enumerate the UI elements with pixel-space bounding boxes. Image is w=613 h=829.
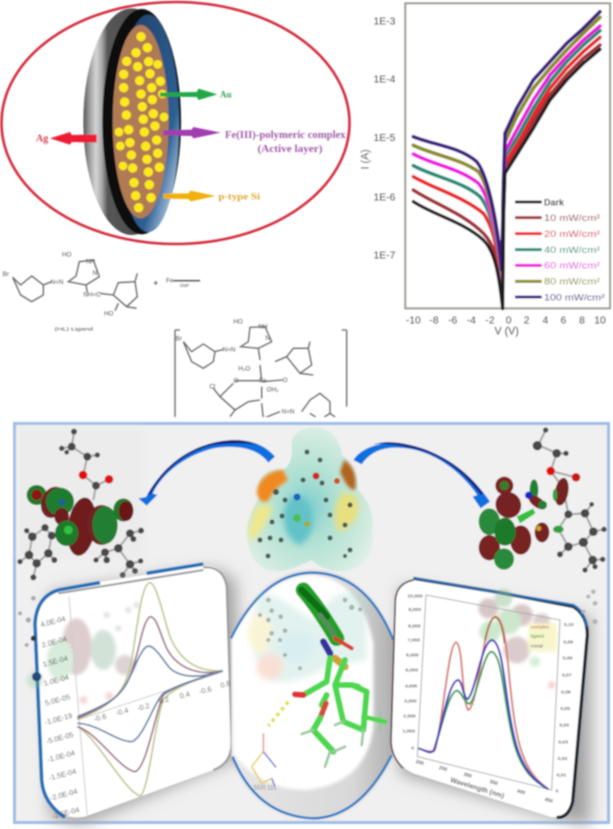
y axis labels: 1E-7 [374, 251, 396, 262]
molecular electrostatic potential surface [247, 427, 373, 571]
y axis labels: 1E-3 [374, 16, 396, 27]
spectrum right axis labels: 0,05 [560, 706, 570, 712]
disc device illustration [83, 8, 181, 235]
card left edge [391, 580, 413, 768]
spectrum left axis labels: 8,000 [408, 623, 421, 629]
chart legend: 80 mW/cm² [544, 277, 600, 287]
voltammogram y axis labels: -2.0E-04 [49, 787, 79, 803]
chemical reaction scheme: OH₂ [267, 387, 279, 394]
panel background and border [14, 424, 608, 822]
spectrum legend text: complex [531, 624, 550, 630]
x axis labels: 10 [594, 315, 606, 326]
ghost atoms outside card [18, 596, 41, 681]
chemical reaction scheme: Br [176, 336, 182, 343]
voltammogram x axis labels: -0.6 [198, 684, 213, 696]
chemical reaction scheme: N [265, 335, 270, 342]
voltammogram x axis labels: -0.6 [93, 712, 107, 724]
arrow and label: Au: Au [220, 90, 231, 100]
ghost orbital image [27, 602, 139, 704]
spectrum right axis labels: 0,07 [562, 673, 572, 679]
spectrum right axis labels: 0,02 [558, 756, 568, 762]
arrow and label: Ag: Ag [36, 133, 48, 144]
ligand structure [3, 252, 137, 317]
card body [392, 579, 587, 817]
chemical reaction scheme: N=N [282, 408, 295, 415]
plus sign and metal reagent: + [153, 278, 158, 287]
y axis title: I (A) [359, 149, 371, 169]
chemical reaction scheme: O [283, 377, 288, 384]
spectrum right axis labels: 0,01 [557, 773, 567, 779]
card: absorption spectrum [391, 578, 598, 827]
x axis labels: -6 [448, 315, 458, 326]
x axis labels: 8 [579, 315, 585, 326]
arrow and label: Ag [36, 132, 97, 145]
arrow and label: Fe(III)-polymeric complex active layer [163, 127, 347, 155]
card blue edge [35, 564, 203, 817]
receptor residue: SER 111 [253, 785, 277, 791]
spectrum x axis labels: 200 [415, 759, 425, 767]
voltammogram y axis labels: 2.0E-04 [41, 634, 68, 650]
chart legend: 20 mW/cm² [544, 229, 600, 239]
arrow and label: p-type Si: p-type Si [218, 192, 260, 202]
docking circle shadow [232, 572, 393, 818]
y axis labels [374, 16, 396, 262]
bottom modelling panel [14, 424, 608, 827]
voltammogram curves [77, 583, 223, 796]
chart legend: 10 mW/cm² [544, 213, 600, 223]
chemical reaction scheme: HO [233, 318, 243, 325]
light background patch [18, 428, 144, 558]
hydrogen bond dashes [268, 702, 288, 726]
chemical reaction scheme: NH [258, 324, 268, 331]
spectrum legend text: ligand [531, 633, 544, 639]
y axis labels: 1E-4 [374, 75, 396, 86]
x axis labels: -10 [406, 315, 421, 326]
x axis labels: 0 [506, 315, 512, 326]
chart frame [405, 3, 610, 308]
spectrum left axis labels: 7,000 [408, 638, 420, 644]
plus sign and metal reagent: Fe [166, 278, 174, 285]
voltammogram y axis labels: -5.0E-05 [45, 730, 75, 746]
ghost electrostatic surface [248, 592, 367, 682]
atoms [17, 429, 144, 580]
curved arrow to HOMO [138, 440, 275, 506]
embedded atoms [258, 450, 352, 558]
spectrum left axis labels: 2,000 [403, 713, 416, 719]
voltammogram y axis labels: -1.0E-04 [46, 748, 76, 764]
card dark right edge [413, 578, 587, 817]
ghost atoms outside card [581, 589, 598, 624]
arrow and label: Fe(III)-polymeric complex active layer: Fe(III)-polymeric complex [225, 130, 347, 141]
voltammogram y axis labels: -1.0E-19 [44, 711, 73, 727]
plus sign and metal reagent: DMF [180, 283, 190, 288]
chemical reaction scheme [3, 252, 347, 420]
voltammogram y axis labels: 4.0E-04 [39, 614, 67, 629]
spectrum legend text: metal [531, 643, 543, 649]
card grey edge [58, 567, 232, 770]
card shadow [50, 568, 242, 825]
device schematic panel [2, 2, 350, 244]
orbital lobes [27, 483, 133, 558]
chart legend: Dark [544, 197, 564, 207]
ligand caption: (HL) Ligand [55, 327, 93, 333]
ligand structure: N [93, 270, 98, 277]
curved arrow to LUMO [353, 442, 490, 508]
chemical reaction scheme: H₂O [238, 366, 250, 373]
chart legend: 40 mW/cm² [544, 245, 600, 255]
chart legend [515, 197, 605, 302]
docking circle blue arcs [231, 573, 393, 818]
red ellipse outline [2, 2, 350, 244]
docking circle body [232, 573, 393, 817]
I-V line chart [359, 3, 610, 337]
card shadow [400, 587, 590, 827]
spectrum x axis labels: 250 [438, 765, 448, 773]
spectrum right axis labels: 0,06 [561, 689, 571, 695]
ligand structure: HO [104, 310, 114, 317]
HOMO orbital molecule [17, 429, 144, 580]
plus sign and metal reagent [153, 278, 200, 288]
spectrum curves [418, 617, 548, 789]
voltammogram x axis labels: 0.8 [219, 679, 231, 690]
yellow nanoparticles [115, 32, 168, 212]
y axis labels: 1E-6 [374, 192, 396, 203]
chemical reaction scheme: Cl [209, 383, 215, 390]
spectrum right axis labels: 0,08 [563, 655, 573, 661]
voltammogram y axis labels: -2.5E-04 [51, 805, 81, 821]
green stick ligand [295, 590, 385, 767]
orbital lobes [479, 477, 571, 570]
spectrum left axis labels [403, 593, 423, 751]
spectrum left axis labels: 10,000 [407, 593, 423, 599]
spectrum plot frame [417, 595, 560, 790]
voltammogram y axis labels [39, 614, 81, 821]
white inner area [232, 575, 373, 790]
ligand structure: Br [3, 271, 9, 278]
spectrum left axis labels: 6,000 [406, 653, 419, 659]
spectrum left axis labels: 5,000 [406, 668, 418, 674]
receptor residue [252, 733, 277, 791]
spectrum x axis labels: 300 [463, 772, 473, 780]
arrow and label: Au [160, 89, 231, 100]
voltammogram x axis labels: 0.2 [158, 695, 170, 706]
spectrum x axis labels: 400 [516, 788, 526, 796]
x axis labels: -4 [467, 315, 476, 326]
chart legend: 60 mW/cm² [544, 261, 600, 271]
x axis labels [406, 315, 606, 326]
ghost orbital image [478, 589, 557, 689]
x axis labels: 6 [560, 315, 566, 326]
voltammogram axes [69, 597, 223, 817]
chart legend: 100 mW/cm² [544, 292, 605, 302]
ligand structure: HO [62, 252, 72, 259]
x axis labels: -8 [429, 315, 439, 326]
spectrum right axis labels: 0,09 [563, 639, 573, 645]
voltammogram x axis labels: -0.4 [115, 706, 129, 718]
atoms [533, 427, 607, 573]
spectrum left axis labels: 9,000 [409, 607, 421, 613]
spectrum left axis labels: 4,000 [405, 683, 418, 689]
x axis labels: -2 [485, 315, 495, 326]
chemical reaction scheme: Fe [259, 378, 267, 385]
voltammogram x axis labels: 0.4 [179, 689, 191, 701]
current curves [413, 12, 600, 308]
spectrum x axis labels [415, 759, 554, 805]
card blue top edge [413, 578, 587, 627]
spectrum right axis labels: 0,03 [558, 739, 568, 745]
spectrum x axis title: Wavelength (nm) [449, 777, 505, 800]
spectrum x axis labels: 350 [489, 779, 499, 787]
ligand structure: N=N [51, 279, 64, 286]
LUMO orbital molecule [479, 427, 607, 573]
orange and yellow potential lobes [257, 470, 288, 502]
spectrum left axis labels: 0 [411, 745, 414, 751]
voltammogram y axis labels: 5.0E-05 [44, 692, 71, 708]
voltammogram x axis labels [93, 679, 231, 724]
spectrum legend text [531, 624, 550, 649]
molecular bonds [20, 432, 141, 577]
x axis labels: 2 [524, 315, 530, 326]
spectrum left axis labels: 3,000 [404, 699, 417, 705]
x axis title: V (V) [495, 325, 519, 337]
spectrum right axis labels: 0,04 [559, 723, 569, 729]
card body [35, 566, 232, 817]
spectrum left axis labels: 1,000 [403, 729, 415, 735]
ligand structure: NH=C [83, 292, 101, 299]
voltammogram y axis labels: -1.5E-04 [48, 767, 77, 783]
ligand structure: NH [86, 258, 96, 265]
spectrum x axis labels: 450 [544, 797, 554, 805]
polymeric complex structure [175, 327, 347, 420]
molecular bonds [538, 430, 604, 570]
card: molecular docking [231, 572, 393, 818]
chemical reaction scheme: N=N [223, 347, 236, 354]
voltammogram x axis labels: -0.2 [136, 701, 151, 713]
arrow and label: Fe(III)-polymeric complex active layer: (Active layer) [257, 144, 322, 155]
x axis labels: 4 [542, 315, 548, 326]
spectrum right axis labels: 0,10 [564, 622, 574, 628]
chemical reaction scheme: O [233, 378, 238, 385]
spectrum right axis labels [556, 622, 574, 795]
arrow and label: p-type Si [163, 191, 260, 202]
card: cyclic voltammogram [18, 564, 242, 825]
spectrum right axis labels: 0 [556, 789, 559, 795]
voltammogram y axis labels: 1.0E-04 [43, 673, 70, 688]
voltammogram y axis labels: 1.5E-04 [42, 654, 69, 669]
y axis labels: 1E-5 [374, 133, 396, 144]
